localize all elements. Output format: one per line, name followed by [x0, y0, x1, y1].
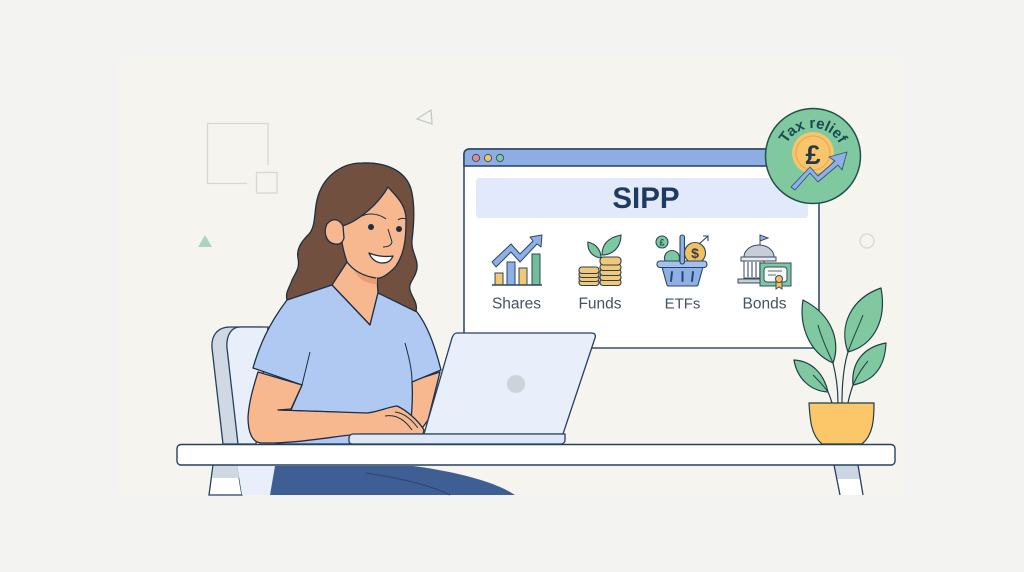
label: ETFs: ETFs	[665, 296, 700, 312]
stems	[828, 352, 853, 403]
near arm and hand	[248, 372, 424, 443]
heading band	[476, 178, 808, 218]
finger lines	[278, 410, 418, 430]
shirt	[253, 285, 441, 444]
icon: Shares	[492, 235, 542, 285]
smile	[369, 253, 393, 263]
heading: SIPP: SIPP	[612, 182, 680, 215]
face and neck	[332, 187, 406, 325]
background panel	[118, 58, 905, 495]
coin	[792, 132, 834, 174]
rising arrow	[791, 152, 847, 190]
leaves	[802, 300, 836, 363]
icon: Funds	[579, 235, 621, 286]
hair	[287, 163, 417, 320]
laptop	[349, 333, 595, 444]
far arm	[405, 372, 440, 434]
window control dots	[472, 154, 504, 162]
window title bar	[464, 149, 819, 166]
ear	[325, 220, 344, 244]
pot	[809, 403, 874, 444]
browser window panel	[464, 149, 819, 348]
table top	[177, 444, 895, 465]
eyes	[368, 224, 374, 230]
laptop base	[349, 434, 565, 444]
badge label: Tax relief	[778, 120, 849, 142]
label: Funds: Funds	[578, 296, 622, 312]
badge: Tax relief: £	[805, 140, 821, 170]
woman	[248, 163, 515, 495]
decorative shapes	[198, 110, 874, 248]
icon: ETFs	[656, 235, 708, 286]
icon: ETFs: $	[691, 245, 699, 261]
brows and nose	[362, 214, 406, 247]
laptop logo	[507, 375, 525, 393]
leaf veins	[813, 315, 868, 392]
trousers	[270, 466, 515, 495]
potted plant	[794, 288, 886, 444]
jaw line	[347, 262, 376, 278]
neck shadow	[354, 270, 377, 284]
shirt sleeve folds	[302, 343, 412, 385]
badge: Tax relief	[764, 108, 862, 204]
icon: ETFs: £	[659, 238, 665, 248]
icon: Bonds	[738, 235, 791, 289]
chair	[209, 327, 277, 495]
label: Bonds: Bonds	[743, 296, 787, 312]
right table leg	[834, 465, 863, 495]
label: Shares: Shares	[492, 296, 541, 312]
